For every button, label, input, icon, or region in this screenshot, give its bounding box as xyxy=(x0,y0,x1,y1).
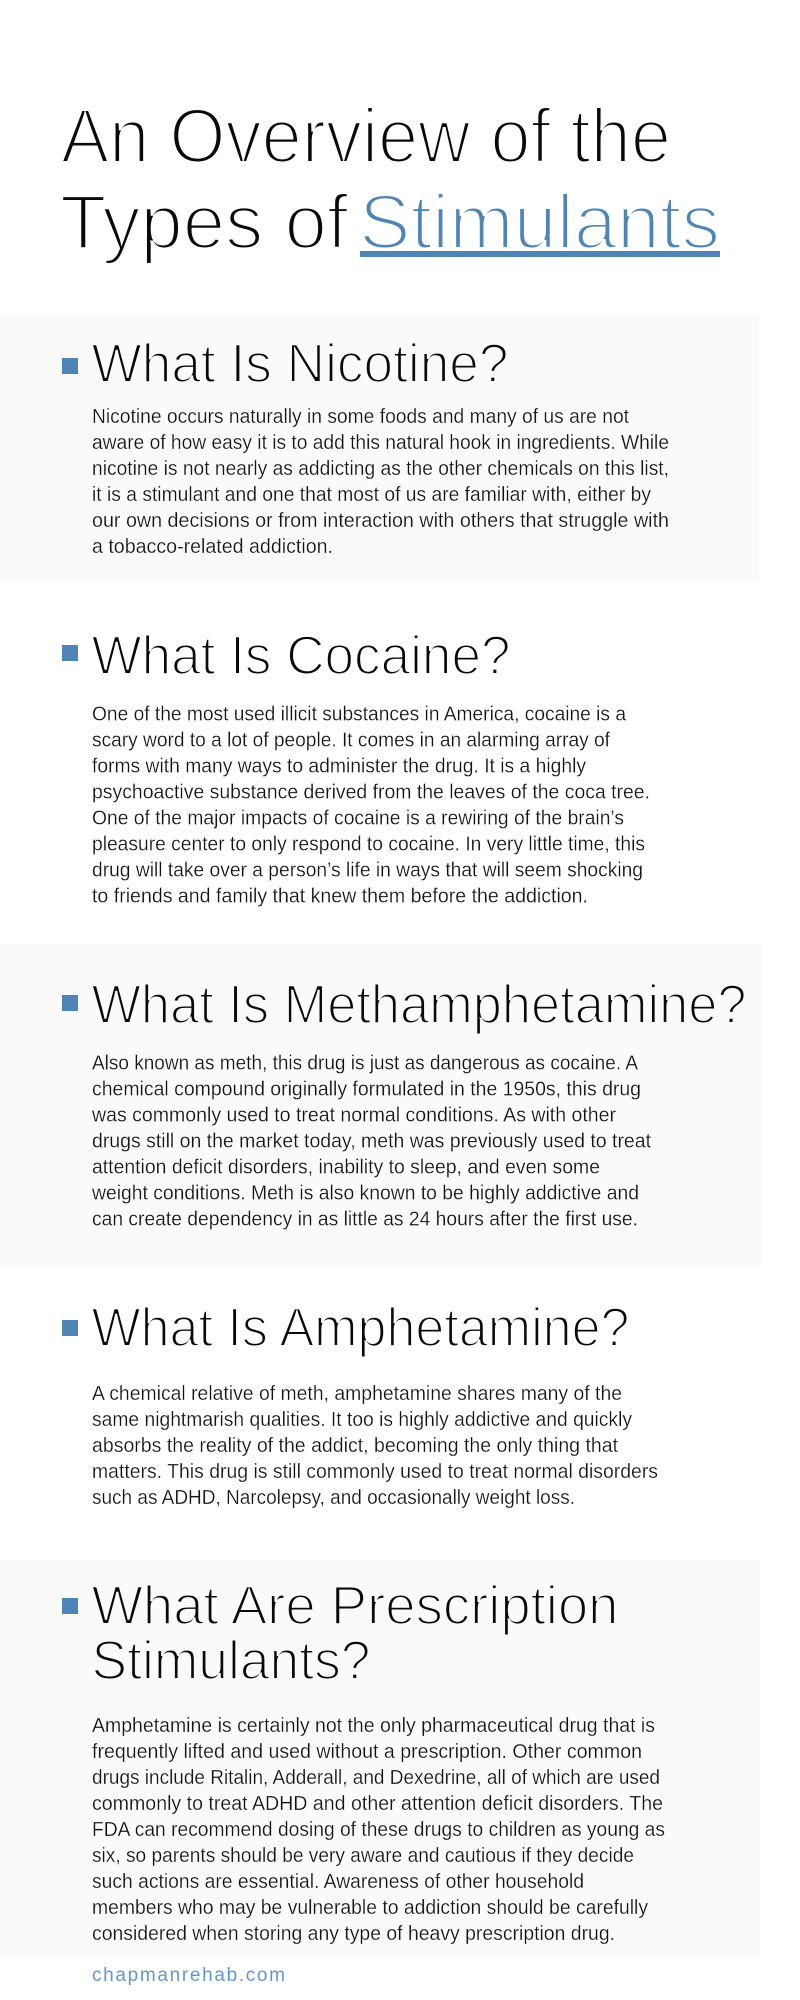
text block: methamphetamine: weight conditions. Meth is also known to be highly addictive and xyxy=(91,1182,639,1204)
title: Stimulants xyxy=(359,180,720,266)
text block: methamphetamine: chemical compound originally formulated in the 1950s, this drug xyxy=(92,1078,641,1100)
text block: nicotine: it is a stimulant and one that most of us are familiar with, either by xyxy=(92,483,652,506)
text block: cocaine: pleasure center to only respond to cocaine. In very little time, this xyxy=(92,832,645,855)
heading: amphetamine: What Is Amphetamine? xyxy=(92,1297,630,1358)
heading: prescription stimulants: What Are Prescription xyxy=(92,1575,618,1636)
text block: amphetamine: absorbs the reality of the addict, becoming the only thing that xyxy=(92,1434,618,1457)
panel: cocaine xyxy=(62,625,650,907)
text block: prescription stimulants: six, so parents should be very aware and cautious if they decide xyxy=(92,1844,634,1867)
text block: prescription stimulants: Amphetamine is certainly not the only pharmaceutical drug that is xyxy=(92,1714,655,1737)
title: Types of xyxy=(60,180,349,266)
heading: methamphetamine: What Is Methamphetamine? xyxy=(92,974,746,1035)
title xyxy=(60,94,720,266)
text block: prescription stimulants: frequently lifted and used without a prescription. Other common xyxy=(92,1740,642,1763)
text block: cocaine xyxy=(92,702,650,907)
text block: cocaine: psychoactive substance derived from the leaves of the coca tree. xyxy=(92,780,650,803)
icon: square bullet xyxy=(62,995,78,1011)
text block: prescription stimulants: members who may be vulnerable to addiction should be carefully xyxy=(92,1896,649,1919)
text block: prescription stimulants: considered when storing any type of heavy prescription drug. xyxy=(92,1922,615,1945)
text block: amphetamine xyxy=(92,1382,658,1509)
text block: methamphetamine: was commonly used to treat normal conditions. As with other xyxy=(91,1104,616,1126)
text block: methamphetamine: can create dependency in as little as 24 hours after the first use. xyxy=(92,1208,638,1230)
text block: prescription stimulants: such actions are essential. Awareness of other household xyxy=(92,1870,584,1893)
text block: cocaine: One of the most used illicit substances in America, cocaine is a xyxy=(92,702,627,725)
text block: cocaine: to friends and family that knew them before the addiction. xyxy=(92,884,588,907)
text block: prescription stimulants xyxy=(92,1714,665,1945)
icon: square bullet xyxy=(62,358,78,374)
text block: prescription stimulants: commonly to treat ADHD and other attention deficit disorders. The xyxy=(92,1792,663,1815)
text block: cocaine: forms with many ways to administer the drug. It is a highly xyxy=(92,754,587,777)
panel: prescription stimulants xyxy=(0,1560,760,1957)
heading: prescription stimulants xyxy=(92,1575,618,1691)
text block: methamphetamine: Also known as meth, this drug is just as dangerous as cocaine. A xyxy=(92,1052,638,1074)
heading: nicotine: What Is Nicotine? xyxy=(92,333,508,394)
icon: square bullet xyxy=(62,1320,78,1336)
panel: nicotine xyxy=(0,315,759,582)
text block: amphetamine: A chemical relative of meth, amphetamine shares many of the xyxy=(92,1382,622,1405)
text block: amphetamine: same nightmarish qualities. It too is highly addictive and quickly xyxy=(92,1408,633,1431)
text block: methamphetamine: attention deficit disorders, inability to sleep, and even some xyxy=(92,1156,600,1178)
text block: cocaine: scary word to a lot of people. It comes in an alarming array of xyxy=(92,728,610,751)
text block: amphetamine: matters. This drug is still commonly used to treat normal disorders xyxy=(92,1460,658,1483)
icon: square bullet xyxy=(62,1598,78,1614)
text block: nicotine xyxy=(92,405,669,558)
text block: nicotine: a tobacco-related addiction. xyxy=(92,535,333,558)
text block: cocaine: One of the major impacts of cocaine is a rewiring of the brain’s xyxy=(92,806,624,829)
text block: nicotine: nicotine is not nearly as addicting as the other chemicals on this list, xyxy=(92,457,669,480)
heading: prescription stimulants: Stimulants? xyxy=(92,1630,370,1691)
text block: amphetamine: such as ADHD, Narcolepsy, and occasionally weight loss. xyxy=(92,1486,575,1509)
text block: methamphetamine: drugs still on the market today, meth was previously used to treat xyxy=(92,1130,651,1152)
text block: nicotine: our own decisions or from interaction with others that struggle with xyxy=(92,509,669,532)
text block: prescription stimulants: drugs include Ritalin, Adderall, and Dexedrine, all of which are used xyxy=(92,1766,660,1789)
text block: methamphetamine xyxy=(91,1052,651,1230)
heading: cocaine: What Is Cocaine? xyxy=(92,625,510,686)
panel: methamphetamine xyxy=(0,944,762,1265)
footer: website: chapmanrehab.com xyxy=(92,1965,285,1986)
title: An Overview of the xyxy=(61,94,671,180)
text block: nicotine: aware of how easy it is to add this natural hook in ingredients. While xyxy=(92,431,669,454)
text block: prescription stimulants: FDA can recommend dosing of these drugs to children as young as xyxy=(92,1818,665,1841)
text block: cocaine: drug will take over a person’s life in ways that will seem shocking xyxy=(92,858,643,881)
panel: amphetamine xyxy=(62,1297,658,1509)
icon: square bullet xyxy=(62,645,78,661)
text block: nicotine: Nicotine occurs naturally in some foods and many of us are not xyxy=(92,405,629,428)
